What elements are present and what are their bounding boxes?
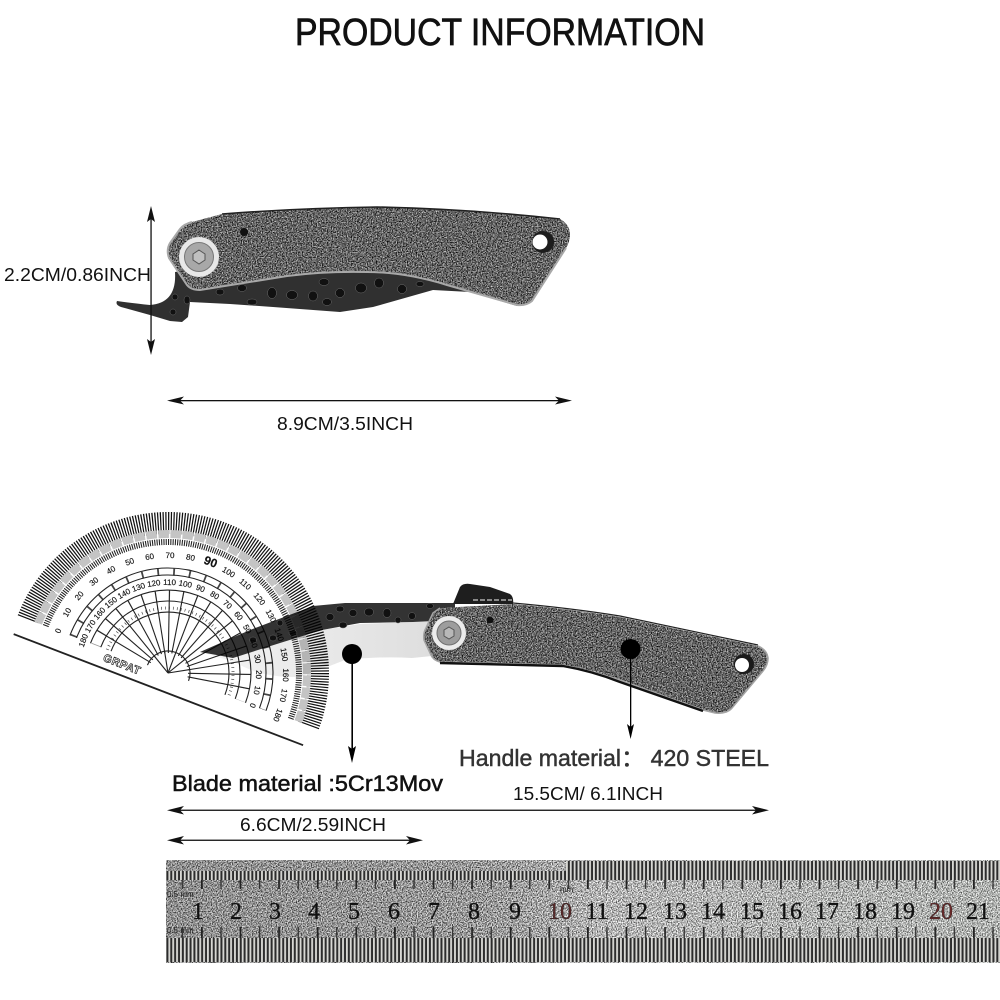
overall length label: 15.5CM/ 6.1INCH xyxy=(513,784,663,804)
length arrow closed xyxy=(167,396,572,404)
closed knife handle xyxy=(168,207,570,305)
protractor inner scale numbers: 40 xyxy=(248,638,259,650)
blade material marker and arrow xyxy=(342,644,362,763)
protractor inner scale numbers xyxy=(77,550,291,713)
protractor inner scale numbers: 0 xyxy=(247,702,257,710)
ruler numbers: 16 xyxy=(778,899,802,925)
protractor outer scale numbers: 180 xyxy=(271,707,284,723)
open knife spine dimples xyxy=(250,604,445,643)
protractor outer scale numbers: 160 xyxy=(281,668,290,682)
protractor base edge xyxy=(14,634,303,745)
ruler numbers: 6 xyxy=(388,899,400,925)
ruler numbers: 15 xyxy=(740,899,764,925)
ruler numbers: 17 xyxy=(815,899,839,925)
open knife lanyard hole xyxy=(734,654,754,674)
protractor inner scale numbers: 80 xyxy=(208,589,221,602)
closed knife blade dimples xyxy=(170,278,424,315)
protractor inner scale numbers: 90 xyxy=(195,583,207,595)
protractor brand label: GRPAT xyxy=(101,652,142,678)
protractor xyxy=(10,462,378,749)
protractor outer scale numbers: 10 xyxy=(61,606,74,619)
knife: open view xyxy=(200,584,768,713)
open knife clip xyxy=(453,584,513,604)
protractor inner scale numbers: 30 xyxy=(252,654,263,664)
protractor inner scale numbers: 100 xyxy=(178,578,193,590)
ruler bottom long ticks xyxy=(166,927,1000,939)
protractor outer scale numbers: 50 xyxy=(124,556,136,568)
ruler numbers: 18 xyxy=(853,899,877,925)
ruler numbers: 11 xyxy=(585,899,609,925)
open knife dark spine xyxy=(200,603,455,658)
ruler numbers: 13 xyxy=(663,899,687,925)
protractor outer scale numbers: 140 xyxy=(273,627,286,643)
protractor outer scale numbers: 110 xyxy=(237,577,253,592)
handle material label: Handle material： 420 STEEL xyxy=(459,745,769,771)
blade length label: 6.6CM/2.59INCH xyxy=(240,815,386,835)
closed knife blade with hook xyxy=(116,260,530,322)
protractor outer scale numbers: 20 xyxy=(73,589,86,602)
ruler unit labels: 0.5 mm xyxy=(167,890,194,899)
protractor outer scale numbers: 40 xyxy=(105,564,118,576)
ruler numbers: 5 xyxy=(348,899,360,925)
ruler shading xyxy=(166,860,1000,963)
height arrow xyxy=(147,206,155,355)
protractor outer scale numbers: 80 xyxy=(185,552,196,563)
protractor inner arcs xyxy=(70,537,304,711)
closed knife small pin xyxy=(240,228,248,236)
protractor outer scale numbers xyxy=(52,512,327,723)
ruler top long ticks xyxy=(166,880,1000,889)
ruler numbers: 12 xyxy=(624,899,648,925)
protractor outer scale numbers: 150 xyxy=(279,647,290,662)
blade length arrow xyxy=(167,836,423,844)
protractor inner scale numbers: 60 xyxy=(232,610,245,623)
ruler numbers: 9 xyxy=(509,899,521,925)
open knife white blade xyxy=(200,620,432,677)
ruler unit labels: 0.5 mm xyxy=(167,926,194,935)
ruler unit labels xyxy=(167,885,574,935)
protractor inner scale numbers: 20 xyxy=(254,670,263,680)
ruler numbers: 3 xyxy=(269,899,281,925)
protractor outer scale numbers: 30 xyxy=(88,575,101,588)
ruler numbers: 8 xyxy=(468,899,480,925)
protractor inner box band xyxy=(96,574,267,701)
ruler numbers: 10 xyxy=(548,899,572,925)
ruler top fine ticks right xyxy=(566,861,1000,880)
protractor outer scale numbers: 60 xyxy=(145,552,155,562)
ruler bottom fine ticks xyxy=(166,938,1000,962)
protractor outer tick band xyxy=(28,479,362,727)
protractor outer scale numbers: 130 xyxy=(264,608,278,625)
ruler numbers: 21 xyxy=(966,899,990,925)
protractor inner scale numbers: 120 xyxy=(147,578,162,589)
protractor radial lines xyxy=(92,566,274,702)
length label closed: 8.9CM/3.5INCH xyxy=(277,414,413,434)
ruler unit labels: mm xyxy=(560,885,574,894)
blade material label: Blade material :5Cr13Mov xyxy=(172,771,443,796)
ruler top fine ticks left xyxy=(166,871,566,880)
protractor outer scale numbers: 0 xyxy=(53,627,63,635)
protractor middle box band xyxy=(74,543,298,709)
open knife pivot screw xyxy=(432,616,466,650)
protractor inner scale numbers: 50 xyxy=(241,623,254,636)
closed knife pivot screw xyxy=(179,237,219,277)
protractor inner tick band xyxy=(46,504,337,720)
protractor outer scale numbers: 120 xyxy=(252,591,267,607)
ruler numbers: 2 xyxy=(230,899,242,925)
ruler numbers: 14 xyxy=(701,899,725,925)
protractor inner scale numbers: 130 xyxy=(131,581,147,594)
protractor outer box band xyxy=(38,493,348,723)
ruler numbers: 4 xyxy=(308,899,320,925)
protractor inner scale numbers: 180 xyxy=(77,632,90,648)
protractor inner scale numbers: 150 xyxy=(103,595,119,610)
protractor body xyxy=(10,462,378,749)
ruler numbers: 7 xyxy=(428,899,440,925)
protractor outer scale numbers: 170 xyxy=(278,688,289,703)
ruler numbers xyxy=(192,899,990,925)
title: PRODUCT INFORMATION xyxy=(295,12,705,54)
closed knife lanyard hole xyxy=(532,231,554,253)
knife: closed view xyxy=(116,207,570,322)
protractor inner scale numbers: 10 xyxy=(251,685,262,696)
height label: 2.2CM/0.86INCH xyxy=(4,265,151,285)
ruler body xyxy=(166,860,1000,963)
steel ruler xyxy=(166,860,1000,963)
handle material marker and arrow xyxy=(620,639,640,739)
protractor inner scale numbers: 70 xyxy=(221,598,234,611)
protractor outer scale numbers: 90 xyxy=(202,553,220,571)
protractor outer scale numbers: 100 xyxy=(220,565,237,580)
ruler numbers: 20 xyxy=(929,899,953,925)
open knife handle xyxy=(424,603,768,713)
protractor inner scale numbers: 160 xyxy=(92,605,108,622)
protractor inner scale numbers: 140 xyxy=(116,586,133,601)
protractor outer scale numbers: 70 xyxy=(166,551,175,560)
protractor inner scale numbers: 170 xyxy=(83,618,98,634)
overall length arrow xyxy=(167,806,769,814)
ruler numbers: 1 xyxy=(192,899,204,925)
open knife small pin xyxy=(486,616,494,624)
ruler numbers: 19 xyxy=(891,899,915,925)
protractor inner scale numbers: 110 xyxy=(163,578,177,587)
